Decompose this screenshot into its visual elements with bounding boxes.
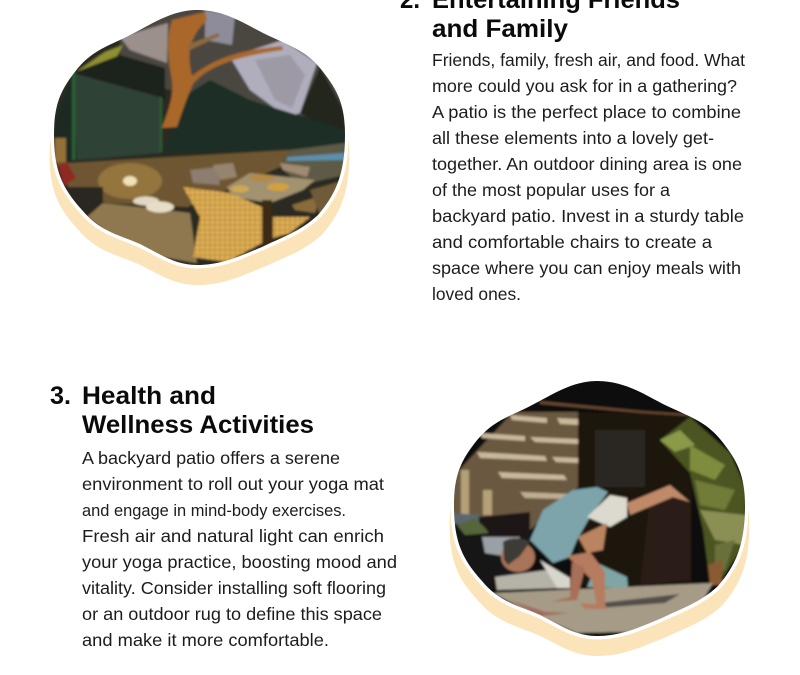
heading: 3. Health and Wellness Activities: Wellness Activities xyxy=(82,411,314,439)
text block: entertaining paragraph: backyard patio. Invest in a sturdy table xyxy=(432,206,744,226)
heading: 3. Health and Wellness Activities: 3. xyxy=(50,382,71,410)
heading: 3. Health and Wellness Activities xyxy=(50,382,314,439)
text block: wellness paragraph: or an outdoor rug to define this space xyxy=(82,604,382,624)
text block: wellness paragraph: your yoga practice, boosting mood and xyxy=(82,552,397,572)
text block: wellness paragraph: vitality. Consider installing soft flooring xyxy=(82,578,386,598)
heading: 3. Health and Wellness Activities: Health and xyxy=(82,382,216,410)
text block: wellness paragraph: Fresh air and natural light can enrich xyxy=(82,526,384,546)
text block: wellness paragraph: environment to roll out your yoga mat xyxy=(82,474,384,494)
heading: 2. Entertaining Friends and Family xyxy=(400,0,680,43)
text block: wellness paragraph: and make it more comfortable. xyxy=(82,630,329,650)
photo: man doing yoga arm balance in blob frame xyxy=(450,376,750,656)
cream blob backing xyxy=(450,401,749,656)
text block: entertaining paragraph: more could you ask for in a gathering? xyxy=(432,76,737,96)
text block: entertaining paragraph xyxy=(432,50,745,304)
text block: entertaining paragraph: of the most popular uses for a xyxy=(432,180,670,200)
text block: entertaining paragraph: Friends, family, fresh air, and food. What xyxy=(432,50,745,70)
text block: entertaining paragraph: space where you can enjoy meals with xyxy=(432,258,741,278)
text block: entertaining paragraph: together. An outdoor dining area is one xyxy=(432,154,742,174)
heading: 2. Entertaining Friends and Family: and Family xyxy=(432,15,568,43)
text block: entertaining paragraph: all these elements into a lovely get- xyxy=(432,128,714,148)
text block: wellness paragraph: A backyard patio offers a serene xyxy=(82,448,340,468)
text block: entertaining paragraph: A patio is the perfect place to combine xyxy=(432,102,741,122)
text block: wellness paragraph xyxy=(82,448,397,650)
text block: entertaining paragraph: loved ones. xyxy=(432,284,521,304)
photo: outdoor dining patio in blob frame xyxy=(50,5,350,285)
text block: entertaining paragraph: and comfortable chairs to create a xyxy=(432,232,712,252)
text block: wellness paragraph: and engage in mind-body exercises. xyxy=(82,501,346,520)
cream blob backing xyxy=(50,30,349,285)
